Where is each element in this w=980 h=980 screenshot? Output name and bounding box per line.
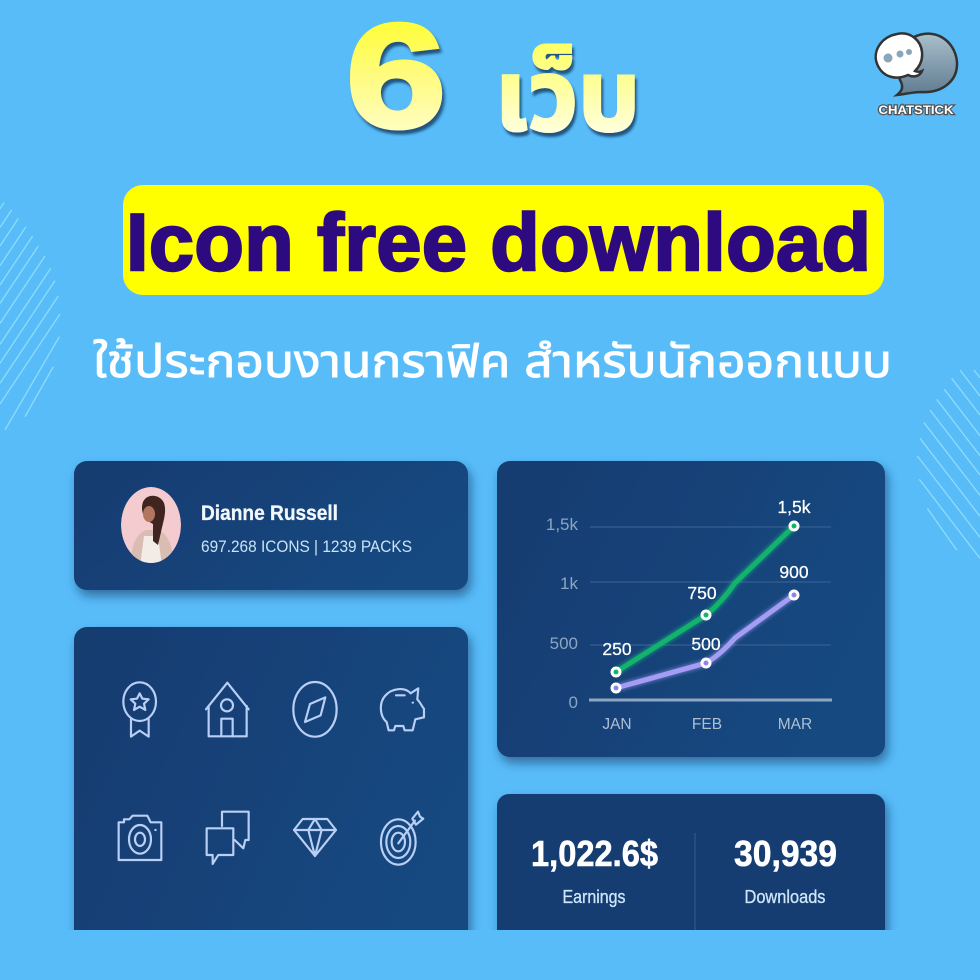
panel: line chart bbox=[497, 461, 885, 757]
line: purple series bbox=[616, 595, 794, 688]
stat: downloads: 30,939 bbox=[734, 833, 837, 874]
data points bbox=[612, 522, 798, 692]
y axis labels: 500 bbox=[550, 634, 578, 653]
logo: Chatstick: CHATSTICK bbox=[878, 103, 954, 117]
data labels: 1,5k bbox=[777, 497, 811, 517]
avatar bbox=[121, 487, 181, 566]
icon: camera bbox=[119, 816, 161, 860]
icon: target bbox=[381, 812, 423, 865]
x axis labels: MAR bbox=[778, 716, 812, 733]
stats line: 697.268 ICONS | 1239 PACKS bbox=[201, 537, 412, 556]
y axis labels bbox=[546, 515, 578, 712]
data labels: 750 bbox=[687, 583, 717, 603]
stat: earnings: 1,022.6$ bbox=[531, 833, 658, 874]
stat: earnings bbox=[531, 833, 658, 907]
banner: Icon free download: Icon free download bbox=[126, 198, 871, 288]
y axis labels: 1k bbox=[560, 574, 578, 593]
panel: earnings and downloads bbox=[493, 793, 895, 930]
data labels: 250 bbox=[602, 639, 632, 659]
x axis labels: FEB bbox=[692, 716, 722, 733]
name: Dianne Russell bbox=[201, 502, 338, 525]
y axis labels: 1,5k bbox=[546, 515, 578, 534]
decorative hatch: left bbox=[0, 203, 60, 430]
data labels: 500 bbox=[691, 634, 721, 654]
line: green series bbox=[616, 526, 794, 672]
data labels: 900 bbox=[779, 562, 809, 582]
logo: Chatstick bbox=[876, 33, 957, 117]
icon: piggy bank bbox=[381, 688, 424, 730]
icon: speech bubbles bbox=[207, 812, 249, 864]
x axis labels: JAN bbox=[602, 716, 632, 733]
subtitle: ใช้ประกอบงานกราฟิค สำหรับนักออกแบบ bbox=[93, 335, 892, 387]
data labels bbox=[602, 497, 811, 659]
y axis labels: 0 bbox=[569, 693, 578, 712]
icon: ribbon badge bbox=[123, 682, 156, 737]
title: Thai word: เว็บ bbox=[495, 40, 640, 151]
stat: downloads bbox=[734, 840, 836, 904]
stat: earnings: Earnings bbox=[562, 887, 626, 907]
icon: house bbox=[206, 683, 249, 736]
stat: downloads: Downloads bbox=[744, 887, 826, 907]
icon: compass bbox=[293, 682, 337, 737]
icon: diamond bbox=[294, 819, 336, 856]
x axis labels bbox=[602, 716, 812, 733]
decorative hatch: right bbox=[917, 370, 980, 558]
panel: icon grid bbox=[74, 627, 468, 967]
panel: profile card bbox=[74, 461, 468, 590]
